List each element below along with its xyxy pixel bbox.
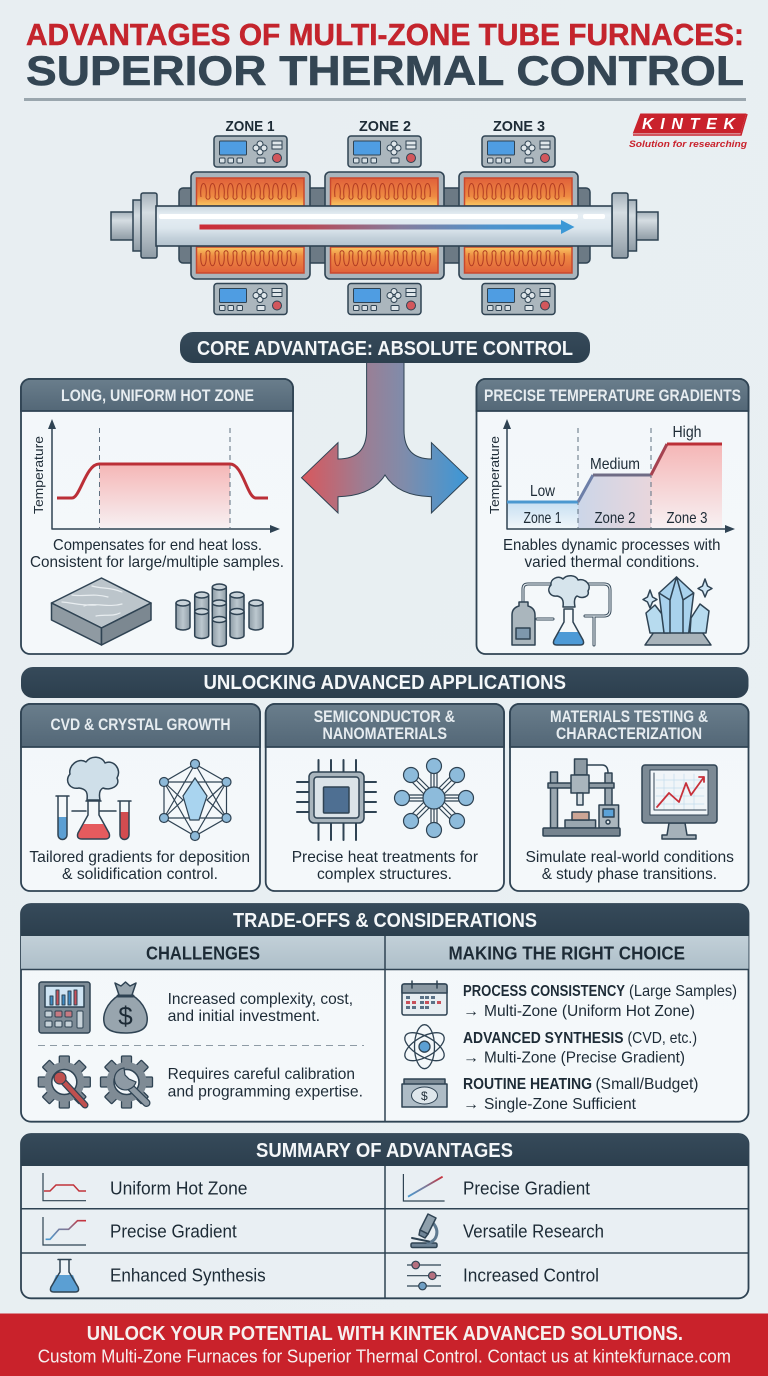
chart: stepped temperature gradient: Zone 2	[594, 510, 636, 527]
zone labels	[226, 118, 545, 135]
icon: flask	[50, 1260, 79, 1292]
core advantage banner: CORE ADVANTAGE: ABSOLUTE CONTROL	[197, 338, 573, 360]
icon: money bag: $	[118, 1001, 133, 1031]
icon: money bag	[104, 982, 147, 1033]
icon: linear gradient	[403, 1174, 445, 1201]
description: varied thermal conditions.	[524, 554, 700, 571]
text: complexity: and initial investment.	[168, 1008, 320, 1025]
text: choices: →	[463, 1050, 479, 1066]
chart: stepped temperature gradient: Medium	[590, 456, 640, 473]
description: Consistent for large/multiple samples.	[30, 554, 284, 571]
chart: stepped temperature gradient: Low	[530, 483, 555, 500]
text: choices: ADVANCED SYNTHESIS	[463, 1030, 624, 1047]
heading: CHARACTERIZATION	[556, 724, 702, 743]
icon: microscope	[411, 1214, 437, 1248]
chart: uniform temperature profile	[31, 419, 280, 533]
label: uniform hot zone: Uniform Hot Zone	[110, 1178, 248, 1198]
description	[503, 537, 720, 571]
label: precise gradient: Precise Gradient	[110, 1222, 237, 1242]
icon: monitor with chart	[642, 765, 717, 839]
icon: flask with test tubes	[56, 757, 131, 840]
label: precise gradient: Precise Gradient	[463, 1178, 590, 1198]
flow arrow	[200, 220, 574, 234]
text: choices: →	[463, 1003, 479, 1020]
text: choices: (Large Samples)	[629, 983, 737, 1000]
icon: gear with grey wrench	[100, 1056, 152, 1108]
tube	[111, 193, 658, 258]
description: Tailored gradients for deposition	[29, 849, 250, 866]
panel: materials testing	[510, 704, 748, 891]
icon: stepped curve	[43, 1217, 86, 1245]
icon: gear with red wrench	[38, 1056, 90, 1108]
footer: UNLOCK YOUR POTENTIAL WITH KINTEK ADVANCED SOLUTIONS.	[87, 1323, 683, 1345]
heading: LONG, UNIFORM HOT ZONE	[61, 386, 254, 405]
icon: chip	[297, 760, 376, 840]
text: choices: →	[463, 1096, 479, 1113]
logo: KINTEK: Solution for researching	[629, 139, 747, 150]
icon: atom	[400, 1025, 449, 1069]
panel: precise temperature gradients	[476, 379, 748, 654]
panel: trade-offs and considerations	[21, 904, 748, 1122]
text: choices: ROUTINE HEATING	[463, 1076, 592, 1093]
chart: stepped temperature gradient: High	[672, 424, 702, 441]
description	[292, 849, 479, 883]
title: ADVANTAGES OF MULTI-ZONE TUBE FURNACES:	[26, 18, 744, 52]
description: Simulate real-world conditions	[526, 849, 734, 866]
icon: crystal lattice	[160, 760, 231, 840]
label: versatile research: Versatile Research	[463, 1222, 604, 1242]
label: increased control: Increased Control	[463, 1266, 599, 1286]
icon: uniform curve	[43, 1173, 86, 1201]
heading	[550, 707, 708, 743]
heating blocks	[179, 172, 590, 279]
heading	[314, 707, 455, 743]
text: calibration: Requires careful calibration	[168, 1066, 355, 1083]
description: & solidification control.	[62, 866, 218, 883]
heading: CVD & CRYSTAL GROWTH	[50, 715, 230, 734]
heading: TRADE-OFFS & CONSIDERATIONS	[233, 910, 537, 932]
zone labels: ZONE 2	[359, 118, 411, 135]
sub-header row: MAKING THE RIGHT CHOICE	[448, 944, 685, 964]
zone labels: ZONE 1	[226, 118, 274, 135]
description: Enables dynamic processes with	[503, 537, 720, 554]
icon: CVD apparatus	[512, 576, 610, 645]
panel: long uniform hot zone	[21, 379, 293, 654]
description: Compensates for end heat loss.	[53, 537, 262, 554]
logo: KINTEK	[629, 113, 747, 150]
panel: CVD and crystal growth	[21, 704, 260, 891]
icon: banknotes	[402, 1079, 447, 1107]
description	[526, 849, 734, 883]
description: Precise heat treatments for	[292, 849, 479, 866]
text: choices: Single-Zone Sufficient	[484, 1096, 637, 1113]
heading: SUMMARY OF ADVANTAGES	[256, 1140, 513, 1162]
icon: metal slab	[52, 578, 151, 645]
title: SUPERIOR THERMAL CONTROL	[26, 47, 744, 94]
banner: unlocking advanced applications	[21, 667, 748, 698]
icon: testing machine	[543, 759, 620, 836]
text: choices: (Small/Budget)	[596, 1076, 698, 1093]
icon: calendar	[402, 981, 447, 1015]
chart: stepped temperature gradient: Zone 1	[524, 510, 562, 527]
text: calibration: and programming expertise.	[168, 1084, 363, 1101]
text: choices: Multi-Zone (Precise Gradient)	[484, 1050, 685, 1066]
heading: NANOMATERIALS	[322, 724, 447, 743]
icon: nanostructure	[394, 758, 474, 838]
icon: multiple cylinders	[176, 584, 263, 646]
text: choices: PROCESS CONSISTENCY	[463, 983, 625, 1000]
chart: uniform temperature profile: Temperature	[31, 436, 46, 514]
control panels	[214, 136, 555, 314]
panel: summary of advantages	[21, 1134, 748, 1298]
text: calibration	[168, 1066, 363, 1101]
description	[30, 537, 284, 571]
description: & study phase transitions.	[542, 866, 717, 883]
banner: unlocking advanced applications: UNLOCKING ADVANCED APPLICATIONS	[204, 672, 566, 694]
sub-header row: CHALLENGES	[146, 944, 260, 964]
icon: banknotes: $	[421, 1089, 428, 1103]
label: enhanced synthesis: Enhanced Synthesis	[110, 1266, 266, 1286]
furnace diagram	[111, 118, 658, 314]
text: choices	[463, 983, 737, 1113]
chart: stepped temperature gradient: Temperature	[487, 436, 502, 514]
heading: MATERIALS TESTING &	[550, 707, 708, 726]
icon: crystal	[643, 577, 712, 645]
heading: SEMICONDUCTOR &	[314, 707, 455, 726]
panel: semiconductor and nanomaterials	[266, 704, 504, 891]
footer: Custom Multi-Zone Furnaces for Superior Thermal Control. Contact us at kintekfurnace.com	[38, 1346, 731, 1366]
logo: KINTEK: KINTEK	[642, 116, 736, 133]
chart: stepped temperature gradient: Zone 3	[666, 510, 708, 527]
chart: stepped temperature gradient	[487, 419, 735, 533]
text: choices: (CVD, etc.)	[628, 1030, 697, 1047]
text: complexity	[168, 991, 353, 1025]
icon: sliders	[407, 1261, 441, 1290]
description: complex structures.	[317, 866, 452, 883]
footer	[0, 1314, 768, 1376]
icon: control panel	[39, 982, 90, 1033]
title	[24, 18, 746, 101]
text: choices: Multi-Zone (Uniform Hot Zone)	[484, 1003, 695, 1020]
core advantage banner	[180, 332, 590, 513]
zone labels: ZONE 3	[493, 118, 545, 135]
text: complexity: Increased complexity, cost,	[168, 991, 353, 1008]
description	[29, 849, 250, 883]
sub-header row	[21, 936, 748, 1121]
